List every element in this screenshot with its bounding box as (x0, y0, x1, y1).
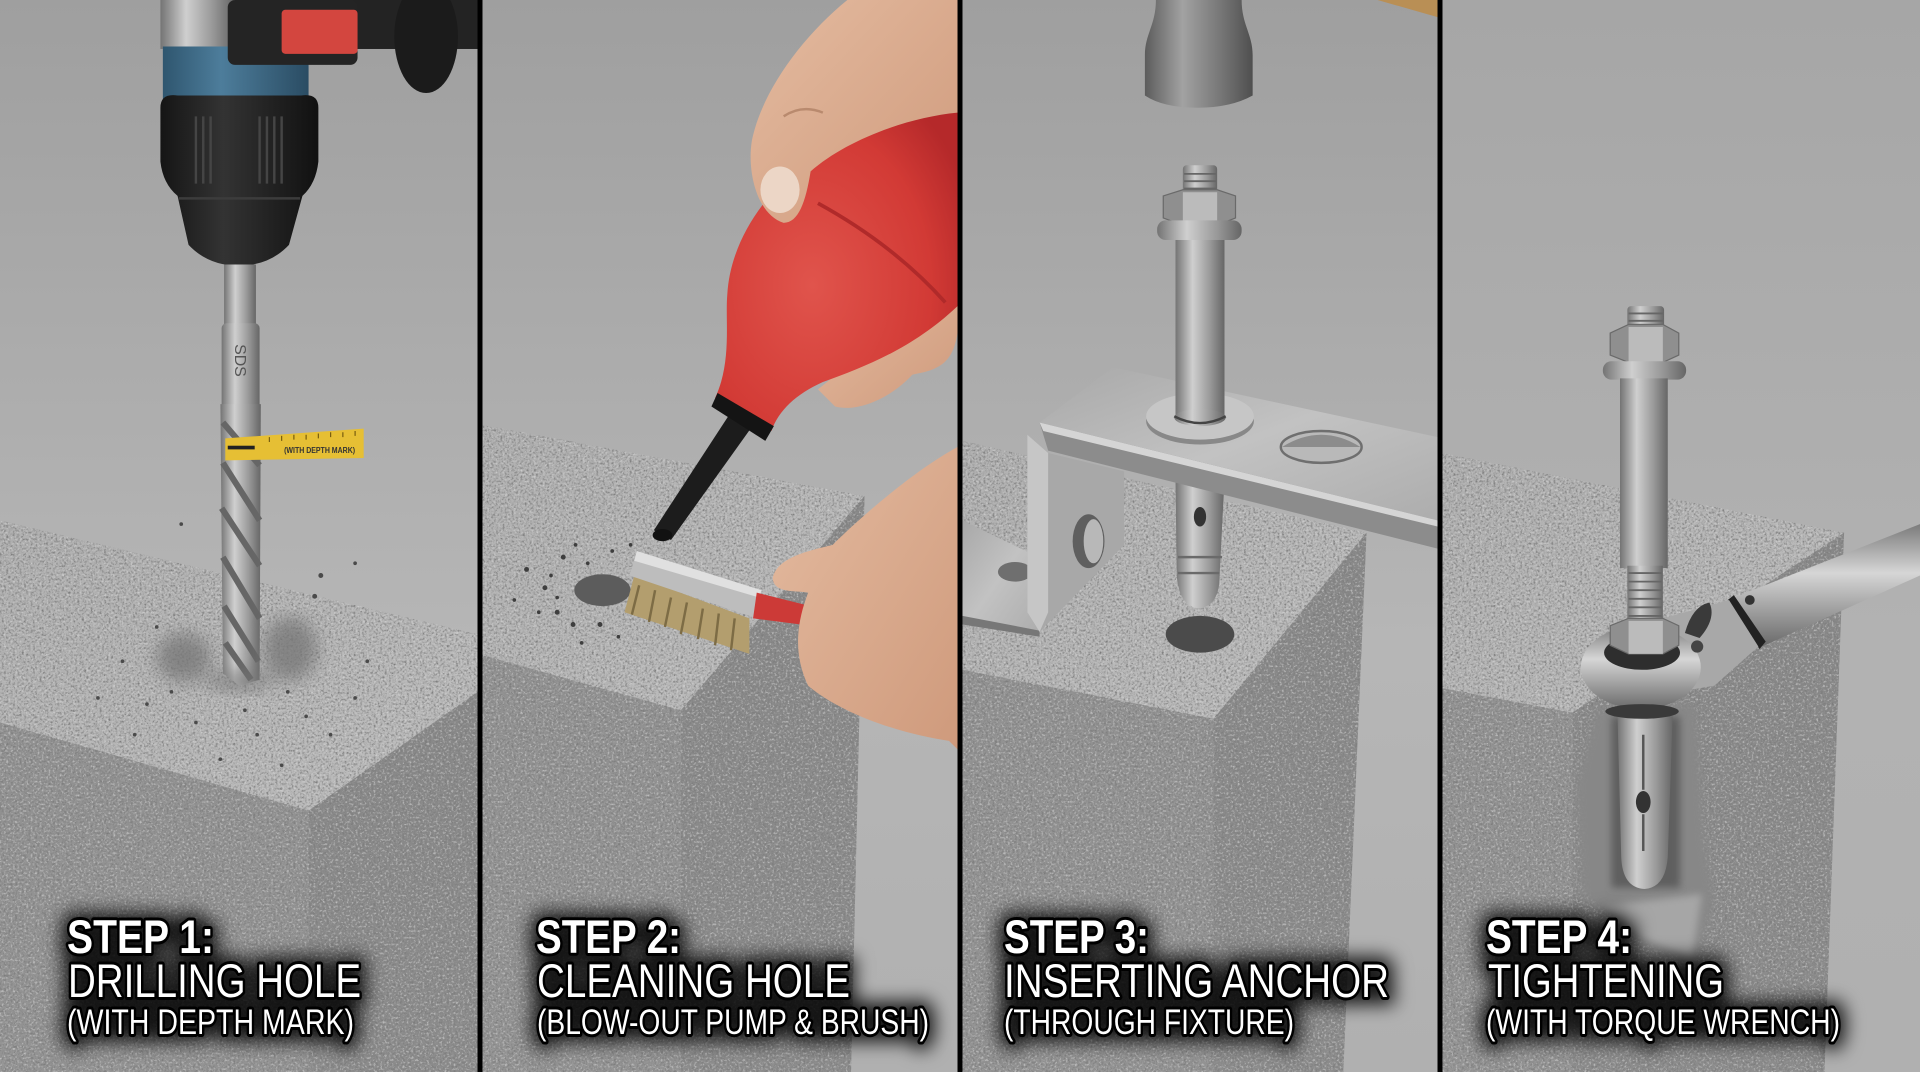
anchor bolt with washers and nut (1146, 165, 1254, 444)
drill collar (160, 0, 234, 49)
depth mark tape (225, 429, 364, 460)
concrete block (0, 520, 478, 1072)
blower nozzle (653, 393, 774, 541)
depth mark tape: (WITH DEPTH MARK) (284, 445, 355, 455)
embedded anchor sleeve (1618, 716, 1673, 889)
debris (96, 522, 369, 767)
SDS marking: SDS (231, 344, 248, 377)
step 4 title: TIGHTENING (1488, 954, 1724, 1007)
concrete block (1442, 453, 1844, 1072)
step 1 title: DRILLING HOLE (68, 954, 361, 1007)
caption: step 1 (67, 910, 361, 1042)
panel: step 1 drilling hole (0, 0, 478, 1072)
thumbnail (760, 167, 800, 213)
hammer handle (1378, 0, 1438, 17)
wire brush (624, 551, 816, 654)
step 3 heading: STEP 3: (1004, 910, 1149, 963)
step 4 heading: STEP 4: (1486, 910, 1632, 963)
drill mode switch (228, 0, 358, 65)
drill handle and side grip (349, 0, 478, 93)
drill bit (220, 264, 261, 686)
step 1 note: (WITH DEPTH MARK) (67, 1003, 354, 1042)
concrete block (482, 425, 864, 1072)
caption: step 4 (1486, 910, 1840, 1042)
step 2 note: (BLOW-OUT PUMP & BRUSH) (537, 1003, 929, 1042)
lower hand holding brush (773, 447, 958, 749)
dust debris (512, 543, 632, 645)
step 3 title: INSERTING ANCHOR (1004, 954, 1389, 1007)
hand fingers under bulb (818, 306, 958, 408)
caption: step 2 (536, 910, 929, 1042)
panel: step 3 inserting anchor (962, 0, 1438, 1072)
step 2 title: CLEANING HOLE (537, 954, 850, 1007)
broken concrete recess (1577, 704, 1714, 967)
drill blue body (163, 47, 309, 103)
step 2 heading: STEP 2: (536, 910, 681, 963)
caption: step 3 (1004, 910, 1389, 1042)
panel: step 2 cleaning hole (482, 0, 958, 1072)
concrete block (962, 441, 1367, 1072)
panel: step 4 tightening (1442, 0, 1920, 1072)
step 4 note: (WITH TORQUE WRENCH) (1486, 1003, 1840, 1042)
anchor bolt with nuts and washer (1603, 306, 1686, 654)
step 1 heading: STEP 1: (67, 910, 214, 963)
L-bracket fixture (962, 367, 1438, 637)
anchor lower sleeve (1176, 480, 1224, 609)
step 3 note: (THROUGH FIXTURE) (1004, 1003, 1294, 1042)
drilled hole (1166, 616, 1234, 653)
upper hand holding bulb (751, 0, 958, 223)
drill chuck (160, 95, 318, 266)
hammer head (1145, 0, 1253, 108)
torque wrench (1581, 524, 1920, 719)
red blower bulb (715, 107, 958, 431)
drilled hole (574, 574, 631, 606)
dust cloud (157, 617, 317, 689)
